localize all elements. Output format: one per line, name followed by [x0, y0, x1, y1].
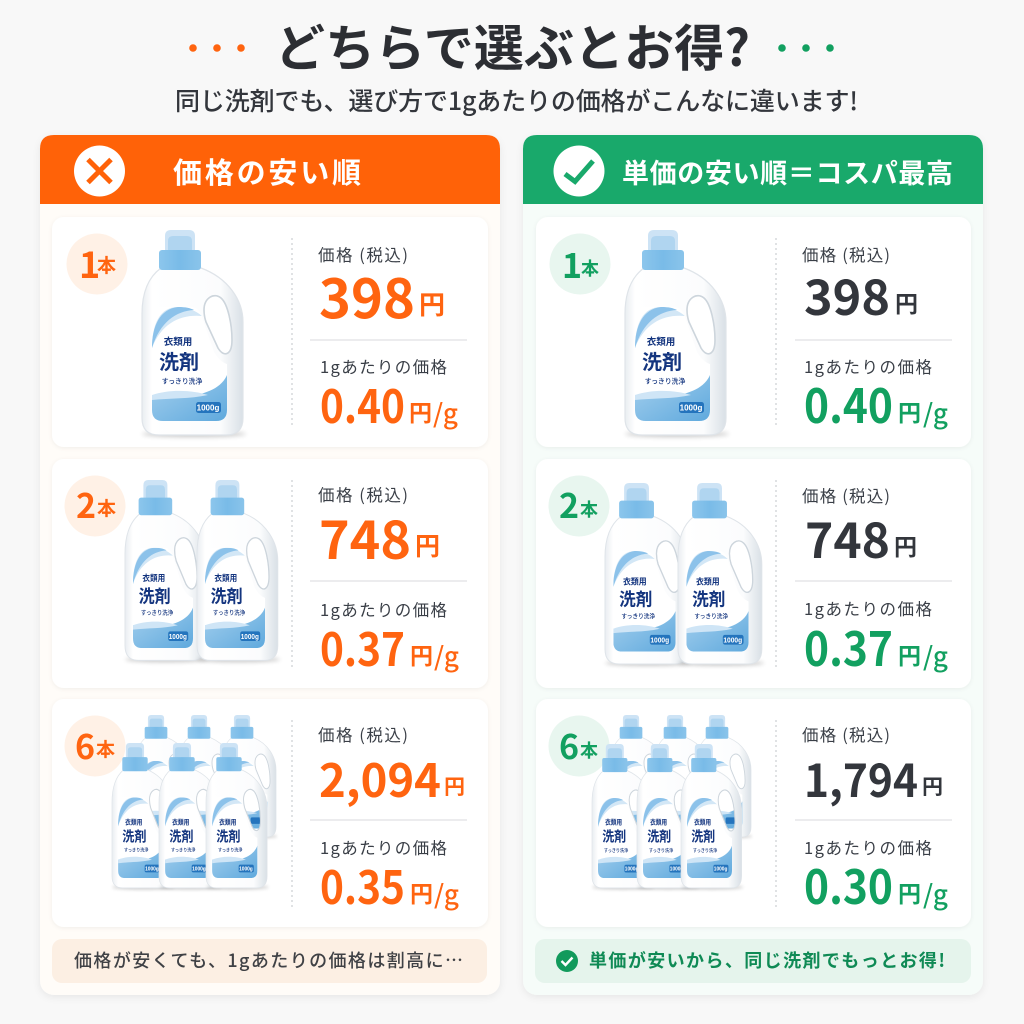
bottle front 1: すっきり洗浄	[604, 846, 629, 854]
bottle 1: 1000g	[650, 637, 669, 644]
icon: small check	[556, 950, 578, 972]
price: 価格 (税込)	[802, 483, 890, 507]
price: 円	[444, 771, 465, 801]
bottle front 1: すっきり洗浄	[124, 846, 149, 854]
unit price: 円	[409, 394, 432, 428]
bottle front 3: 1000g	[239, 866, 253, 873]
bottle front 2: すっきり洗浄	[171, 846, 196, 854]
bottle front 2: 衣類用	[650, 817, 667, 827]
unit price	[804, 596, 948, 680]
bottle: 1000g	[197, 404, 219, 412]
bottle front 2	[159, 743, 222, 889]
header text: 価格の安い順	[173, 150, 361, 192]
unit price: 1gあたりの価格	[804, 354, 932, 378]
bottle 2: すっきり洗浄	[213, 608, 245, 617]
unit price	[804, 835, 948, 918]
bottle 1: 衣類用	[623, 576, 647, 588]
price	[802, 722, 943, 810]
badge: 1本	[550, 234, 610, 294]
unit price: 1gあたりの価格	[804, 835, 932, 859]
icon: cross	[74, 146, 125, 196]
unit price: 0.35	[320, 852, 405, 918]
price: 円	[419, 285, 445, 322]
callout: left	[52, 939, 487, 983]
bottle front 2: 衣類用	[172, 817, 189, 826]
bottle front 3: 1000g	[714, 866, 727, 873]
callout: left: 価格が安くても、1gあたりの価格は割高に…	[74, 947, 463, 973]
unit price	[320, 354, 458, 437]
callout: right	[535, 939, 971, 983]
card: 2 bottles	[536, 459, 971, 688]
unit price: /g	[433, 394, 458, 431]
bottle 1: すっきり洗浄	[621, 611, 655, 621]
bottle front 1: 洗剤	[602, 825, 626, 846]
bottle front 1: 1000g	[145, 866, 159, 873]
unit price: 円	[898, 875, 921, 909]
badge: 6本: 本	[580, 737, 598, 763]
price	[318, 482, 440, 574]
title	[189, 9, 834, 81]
price: 1,794	[804, 745, 918, 810]
bottle front 3: すっきり洗浄	[693, 846, 718, 854]
unit price: 円	[410, 875, 433, 909]
bottle: すっきり洗浄	[162, 376, 202, 386]
bottle: 1000g	[680, 404, 702, 412]
decorative dots: orange	[189, 44, 245, 52]
bottle 1: すっきり洗浄	[141, 608, 173, 617]
price	[802, 242, 918, 329]
bottle front 3	[206, 743, 269, 889]
badge: 2本: 本	[97, 494, 116, 521]
unit price: 0.30	[804, 849, 893, 918]
bottle front 2: すっきり洗浄	[649, 846, 674, 854]
bottle front 3: 洗剤	[216, 825, 240, 846]
unit price	[320, 597, 459, 680]
unit price: 1gあたりの価格	[804, 596, 932, 620]
price: 価格 (税込)	[318, 482, 408, 506]
card: 1 bottle	[536, 217, 971, 447]
bottle	[142, 230, 246, 437]
bottle front 3	[681, 744, 743, 889]
badge: 2本	[548, 476, 610, 536]
bottle front 1: 衣類用	[605, 817, 622, 827]
header: left panel	[40, 135, 500, 204]
bottle 2: 衣類用	[214, 573, 237, 584]
price: 価格 (税込)	[802, 242, 890, 266]
bottle front 2: 1000g	[192, 866, 206, 873]
bottle front 1: 衣類用	[125, 817, 142, 826]
panel: unit price order (right)	[523, 135, 983, 995]
callout: right: 単価が安いから、同じ洗剤でもっとお得!	[589, 947, 945, 973]
bottle: すっきり洗浄	[645, 376, 685, 386]
badge: 6本	[64, 716, 126, 776]
bottle front 3: 衣類用	[694, 817, 711, 827]
unit price: /g	[923, 637, 948, 674]
price: 748	[319, 499, 411, 574]
badge: 6本	[548, 716, 610, 776]
bottle front 1: 1000g	[625, 866, 638, 873]
bottle 2: 1000g	[723, 637, 742, 644]
card: 1 bottle	[52, 217, 488, 447]
unit price: 0.37	[804, 611, 893, 680]
unit price: /g	[434, 637, 459, 674]
price: 円	[415, 527, 440, 563]
badge: 1本: 本	[581, 255, 599, 281]
badge: 2本: 2	[559, 479, 579, 528]
header: right panel	[523, 135, 983, 204]
unit price: 円	[898, 637, 921, 671]
badge: 1本: 1	[562, 239, 582, 288]
unit price	[320, 835, 459, 918]
price	[318, 242, 445, 334]
bottle 2: 衣類用	[696, 576, 720, 588]
title text: どちらで選ぶとお得?	[275, 9, 750, 81]
bottle: 洗剤	[642, 346, 682, 375]
bottle front 3: 衣類用	[219, 817, 236, 826]
unit price: /g	[923, 875, 948, 912]
card: 6 bottles	[536, 699, 971, 927]
panel: price order (left)	[40, 135, 500, 995]
bottle 2: 1000g	[241, 634, 259, 641]
bottle 1: 洗剤	[139, 582, 171, 608]
bottle front 1	[592, 744, 654, 889]
bottle 2: 洗剤	[211, 582, 243, 608]
badge: 1本: 本	[97, 251, 116, 278]
price: 398	[319, 255, 415, 334]
bottle 2	[678, 483, 764, 666]
unit price: /g	[434, 875, 459, 912]
bottle front 2: 洗剤	[647, 825, 671, 846]
bottle 2	[197, 480, 280, 662]
badge: 1本: 1	[79, 237, 100, 289]
card: 2 bottles	[52, 459, 488, 688]
header text: 単価の安い順＝コスパ最高	[622, 152, 953, 191]
price: 価格 (税込)	[318, 242, 408, 266]
bottle back row	[610, 715, 753, 838]
badge: 2本	[64, 476, 126, 536]
bottle front 2	[637, 744, 699, 889]
bottle front 1	[112, 743, 175, 889]
bottle back row	[136, 715, 278, 838]
price	[318, 722, 465, 811]
unit price: 1gあたりの価格	[320, 354, 448, 378]
unit price: 0.40	[320, 371, 405, 437]
bottle 1: 1000g	[169, 634, 187, 641]
unit price: 1gあたりの価格	[320, 835, 448, 859]
price: 円	[922, 771, 943, 801]
badge: 6本: 6	[559, 720, 579, 769]
bottle front 2: 洗剤	[169, 825, 193, 846]
bottle: 洗剤	[159, 346, 199, 375]
price: 398	[804, 259, 890, 329]
price: 円	[894, 528, 917, 562]
bottle: 衣類用	[164, 334, 192, 348]
bottle front 1: 洗剤	[122, 825, 146, 846]
unit price: /g	[923, 394, 948, 431]
unit price: 1gあたりの価格	[320, 597, 448, 621]
bottle	[625, 230, 729, 437]
unit price: 円	[898, 394, 921, 428]
bottle 1	[125, 480, 208, 662]
price: 円	[895, 285, 918, 319]
badge: 2本: 2	[76, 479, 96, 528]
badge: 6本: 本	[96, 735, 115, 762]
bottle 1: 洗剤	[619, 585, 652, 611]
bottle front 3: すっきり洗浄	[218, 846, 243, 854]
icon: check	[554, 146, 604, 196]
price	[802, 483, 917, 572]
bottle front 2: 1000g	[670, 866, 683, 873]
bottle front 3: 洗剤	[691, 825, 715, 846]
bottle 2: 洗剤	[692, 585, 725, 611]
badge: 1本	[66, 234, 128, 294]
subtitle: 同じ洗剤でも、選び方で1gあたりの価格がこんなに違います!	[175, 82, 858, 118]
price: 748	[805, 502, 890, 572]
price: 2,094	[319, 745, 441, 811]
unit price: 0.37	[320, 614, 405, 680]
badge: 6本: 6	[75, 720, 95, 769]
bottle 1: 衣類用	[142, 573, 165, 584]
bottle 2: すっきり洗浄	[694, 611, 728, 621]
bottle 1	[605, 483, 691, 666]
unit price: 0.40	[804, 368, 893, 437]
badge: 2本: 本	[580, 496, 598, 522]
bottle: 衣類用	[647, 334, 675, 348]
card: 6 bottles	[52, 699, 488, 927]
price: 価格 (税込)	[318, 722, 408, 746]
price: 価格 (税込)	[802, 722, 890, 746]
unit price	[804, 354, 948, 437]
unit price: 円	[410, 637, 433, 671]
decorative dots: green	[778, 44, 834, 52]
